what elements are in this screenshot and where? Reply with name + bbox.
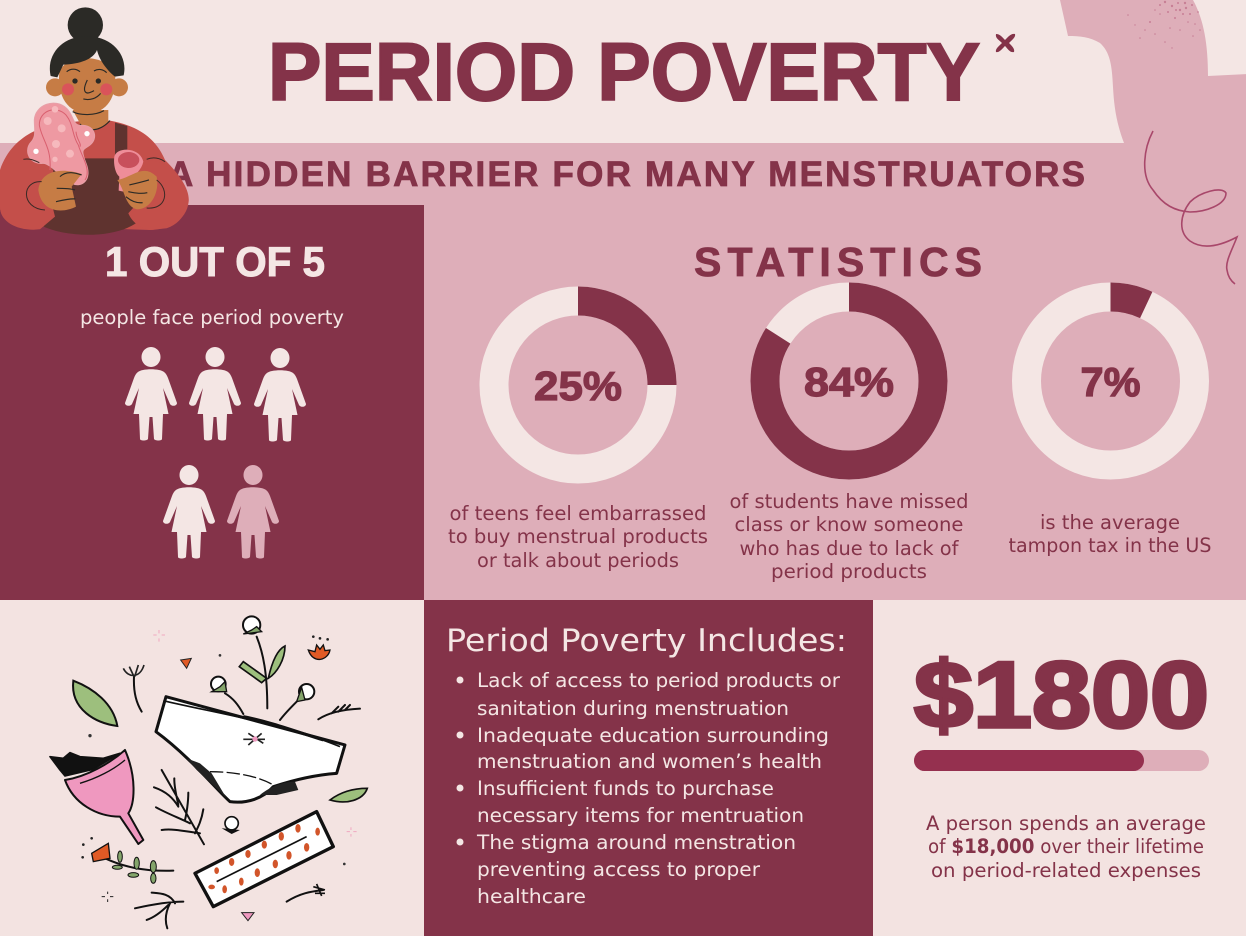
cup bbox=[114, 150, 143, 192]
apron bbox=[40, 123, 143, 235]
icon: person 3 bbox=[254, 348, 306, 442]
pad bbox=[28, 103, 95, 185]
heading: period poverty includes: Period Poverty Includes: bbox=[446, 623, 847, 659]
heading: statistics: STATISTICS bbox=[694, 239, 982, 285]
chart: donut 7% bbox=[1026, 297, 1194, 465]
hands bbox=[38, 171, 82, 210]
subtitle: A HIDDEN BARRIER FOR MANY MENSTRUATORS bbox=[168, 155, 1085, 194]
text: lifetime expenses: on period-related expenses bbox=[931, 859, 1201, 882]
list: includes bullets: healthcare bbox=[477, 885, 586, 908]
title: PERIOD POVERTY bbox=[268, 27, 980, 118]
panel: 1 out of 5 background bbox=[0, 205, 424, 600]
text: people face period poverty: people face period poverty bbox=[80, 306, 344, 329]
cotton flowers bbox=[243, 616, 260, 634]
leaves bbox=[73, 681, 117, 726]
icon: person 5 highlighted bbox=[227, 465, 279, 558]
sleeves bbox=[0, 161, 55, 230]
text: lifetime expenses: A person spends an average bbox=[926, 812, 1206, 835]
orange flowers bbox=[308, 645, 330, 659]
chart: donut 84%: 84% bbox=[804, 359, 894, 405]
text: students caption bbox=[730, 490, 968, 583]
menstrual cup bbox=[65, 750, 143, 844]
list: includes bullets: sanitation during menstruation bbox=[477, 697, 789, 720]
text: students caption: class or know someone bbox=[734, 513, 964, 536]
dandelion tops bbox=[123, 665, 144, 677]
chart: donut 25% bbox=[494, 301, 662, 469]
heading: 1 out of 5: 1 OUT OF 5 bbox=[105, 238, 325, 285]
panel: includes list background bbox=[424, 600, 873, 936]
underwear bbox=[156, 697, 345, 802]
neck and head bbox=[73, 110, 108, 130]
list: includes bullets: menstruation and women’s health bbox=[477, 750, 822, 773]
icon: person 2 bbox=[189, 347, 241, 440]
list: includes bullets: preventing access to proper bbox=[477, 858, 761, 881]
text: students caption: period products bbox=[771, 560, 927, 583]
list: includes bullets: Lack of access to period products or bbox=[477, 669, 841, 692]
text: teens caption: of teens feel embarrassed bbox=[450, 502, 706, 525]
illustration: woman holding pad and cup bbox=[0, 7, 189, 235]
text: teens caption: to buy menstrual products bbox=[448, 525, 708, 548]
progress bar bbox=[914, 750, 1209, 771]
sweater bbox=[0, 121, 189, 230]
chart: donut 7%: 7% bbox=[1080, 359, 1140, 405]
list: includes bullets: necessary items for mentruation bbox=[477, 804, 804, 827]
hair bbox=[68, 7, 103, 43]
text: tampon tax caption: tampon tax in the US bbox=[1008, 534, 1212, 557]
icon: person 4 bbox=[163, 465, 215, 558]
list: includes bullets: Inadequate education surrounding bbox=[477, 724, 829, 747]
list: includes bullets: Insufficient funds to purchase bbox=[477, 777, 774, 800]
face features bbox=[62, 83, 74, 95]
text: students caption: of students have missed bbox=[730, 490, 968, 513]
text: tampon tax caption bbox=[1008, 511, 1212, 557]
text: tampon tax caption: is the average bbox=[1040, 511, 1180, 534]
decorative squiggle bbox=[1145, 131, 1237, 284]
chart: donut 84% bbox=[765, 297, 933, 465]
text: teens caption bbox=[448, 502, 708, 572]
list: includes bullets: The stigma around menstration bbox=[476, 831, 796, 854]
panel: pink header band and statistics background bbox=[0, 0, 1248, 600]
stems and sprigs bbox=[105, 637, 360, 928]
chart: donut 25%: 25% bbox=[534, 363, 622, 409]
big number: $1800: $1800 bbox=[914, 642, 1209, 747]
icon: person 1 bbox=[125, 347, 177, 440]
icon: sparkle cross bbox=[996, 34, 1015, 52]
text: lifetime expenses bbox=[926, 812, 1206, 882]
text: teens caption: or talk about periods bbox=[477, 549, 679, 572]
list: includes bullets bbox=[456, 669, 841, 908]
right edge strip bbox=[1246, 0, 1248, 936]
text: students caption: who has due to lack of bbox=[740, 537, 960, 560]
pill pack bbox=[195, 812, 333, 907]
illustration: period products and botanicals bbox=[50, 616, 367, 928]
text: lifetime expenses: of $18,000 over their lifetime bbox=[928, 835, 1204, 858]
